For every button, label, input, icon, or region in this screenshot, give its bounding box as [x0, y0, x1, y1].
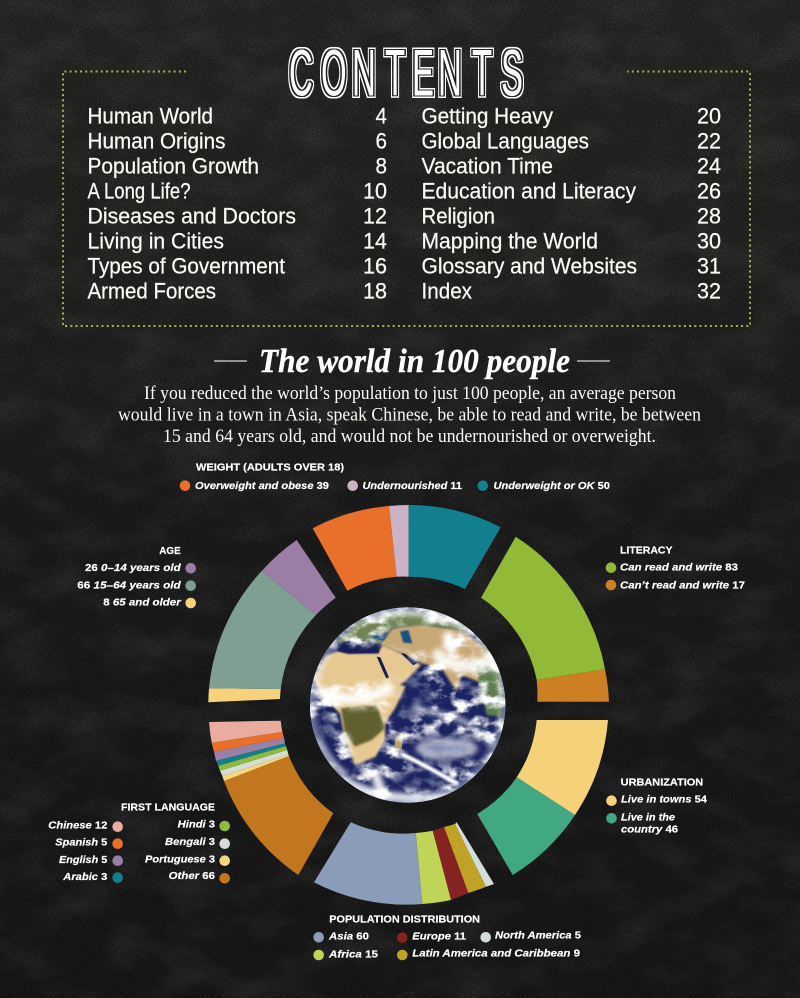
contents list: right column: Vacation Time: [422, 154, 553, 178]
intro text: would live in a town in Asia, speak Chinese, be able to read and write, be between: [118, 406, 701, 426]
contents list: left column: 10: [363, 178, 387, 204]
contents list: right column: Mapping the World: [422, 228, 598, 254]
contents list: right column: Index: [422, 278, 472, 304]
segment group: literacy: [481, 537, 609, 702]
contents list: left column: Population Growth: [88, 154, 259, 178]
legend: population distribution: Europe 11: [412, 930, 466, 942]
contents list: right column: 24: [697, 154, 721, 178]
legend: urbanization: [606, 777, 707, 836]
legend: age: 26 0–14 years old: [85, 562, 181, 574]
legend: population distribution: [313, 913, 581, 960]
segment group: urbanization: [477, 720, 608, 875]
contents list: left column: Human Origins: [88, 128, 226, 154]
contents list: left column: 4: [376, 104, 387, 128]
legend: urbanization: country 46: [621, 824, 678, 836]
contents list: left column: Diseases and Doctors: [88, 204, 296, 228]
legend: first language: [48, 802, 230, 884]
contents list: left column: A Long Life?: [88, 178, 190, 204]
water: Mediterranean: [334, 641, 380, 654]
contents list: left column: Human World: [88, 104, 213, 128]
legend: weight: Overweight and obese 39: [195, 480, 329, 492]
contents list: right column: 26: [697, 178, 721, 204]
intro text: 15 and 64 years old, and would not be undernourished or overweight.: [163, 427, 656, 447]
intro text: If you reduced the world’s population to just 100 people, an average person: [144, 384, 676, 404]
legend: population distribution: Latin America and Caribbean 9: [412, 948, 580, 960]
contents list: left column: 16: [363, 254, 387, 278]
segment group: population distribution: [314, 822, 494, 905]
contents list: left column: 18: [363, 278, 387, 304]
legend: weight: [180, 462, 610, 492]
land: central Africa: [341, 705, 385, 747]
segment group: weight: [313, 505, 501, 591]
contents list: right column: Religion: [422, 204, 495, 228]
contents list: left column: 12: [363, 204, 387, 228]
land: Africa and Arabia: [313, 645, 421, 765]
legend: first language: Arabic 3: [62, 871, 107, 883]
contents list: left column: Living in Cities: [88, 228, 224, 254]
legend: age: 66 15–64 years old: [77, 579, 181, 591]
water: Persian Gulf: [401, 653, 418, 665]
globe: earth photo: [310, 607, 506, 803]
water: Red Sea: [377, 657, 389, 679]
land: Europe and northern Asia: [335, 611, 468, 643]
legend: first language: Hindi 3: [178, 818, 215, 830]
legend: first language: Portuguese 3: [145, 854, 215, 866]
segment group: age: [208, 540, 336, 702]
contents list: left column: 8: [376, 154, 387, 178]
contents list: right column: 32: [697, 278, 721, 304]
contents list: right column: Education and Literacy: [422, 178, 636, 204]
contents list: right column: Glossary and Websites: [422, 254, 637, 278]
legend: age: 8 65 and older: [103, 596, 182, 608]
land: Asia: [379, 624, 503, 696]
contents list: left column: Types of Government: [88, 254, 285, 278]
land: southeast Asia: [475, 663, 502, 717]
contents list: right column: 22: [697, 128, 721, 154]
legend: population distribution: Africa 15: [328, 948, 378, 960]
legend: first language: Bengali 3: [165, 836, 215, 848]
water: Black and Caspian seas: [370, 630, 412, 643]
heading: the world in 100 people: The world in 100 people: [259, 343, 570, 380]
ring chart: [208, 505, 609, 905]
contents dotted frame: [63, 72, 750, 326]
contents list: left column: 6: [376, 128, 387, 154]
legend: age: AGE: [159, 545, 181, 557]
land: Madagascar: [394, 732, 403, 752]
globe limb glow: [310, 607, 505, 803]
intro text: [118, 384, 701, 447]
contents list: left column: [88, 104, 387, 304]
legend: first language: English 5: [59, 854, 107, 866]
legend: first language: Chinese 12: [48, 820, 107, 832]
contents list: right column: 31: [697, 254, 721, 278]
contents list: right column: [422, 104, 721, 304]
legend: literacy: [606, 544, 745, 592]
legend: literacy: LITERACY: [620, 544, 672, 556]
segment group: first language: [209, 721, 333, 875]
legend: literacy: Can’t read and write 17: [620, 580, 745, 592]
contents list: right column: 30: [697, 228, 721, 254]
legend: urbanization: Live in the: [621, 812, 675, 824]
legend: population distribution: North America 5: [495, 930, 581, 942]
cloud layer: [310, 607, 506, 803]
cloud bands: [318, 613, 495, 798]
legend: urbanization: URBANIZATION: [621, 777, 703, 789]
contents list: left column: Armed Forces: [88, 278, 216, 304]
legend: age: [77, 545, 196, 608]
contents list: right column: 28: [697, 204, 721, 228]
legend: weight: WEIGHT (ADULTS OVER 18): [196, 462, 344, 474]
contents list: right column: Getting Heavy: [422, 104, 553, 128]
legend: literacy: Can read and write 83: [620, 562, 738, 574]
legend: urbanization: Live in towns 54: [621, 794, 707, 806]
legend: first language: Other 66: [169, 870, 215, 882]
legend: population distribution: POPULATION DISTRIBUTION: [329, 913, 480, 925]
contents list: right column: 20: [697, 104, 721, 128]
legend: first language: Spanish 5: [55, 836, 107, 848]
legend: population distribution: Asia 60: [328, 930, 369, 942]
legend: first language: FIRST LANGUAGE: [121, 802, 215, 814]
title: CONTENTS: [289, 37, 523, 111]
contents list: left column: 14: [363, 228, 387, 254]
contents list: right column: Global Languages: [422, 128, 589, 154]
legend: weight: Underweight or OK 50: [494, 480, 610, 492]
legend: weight: Undernourished 11: [362, 480, 462, 492]
